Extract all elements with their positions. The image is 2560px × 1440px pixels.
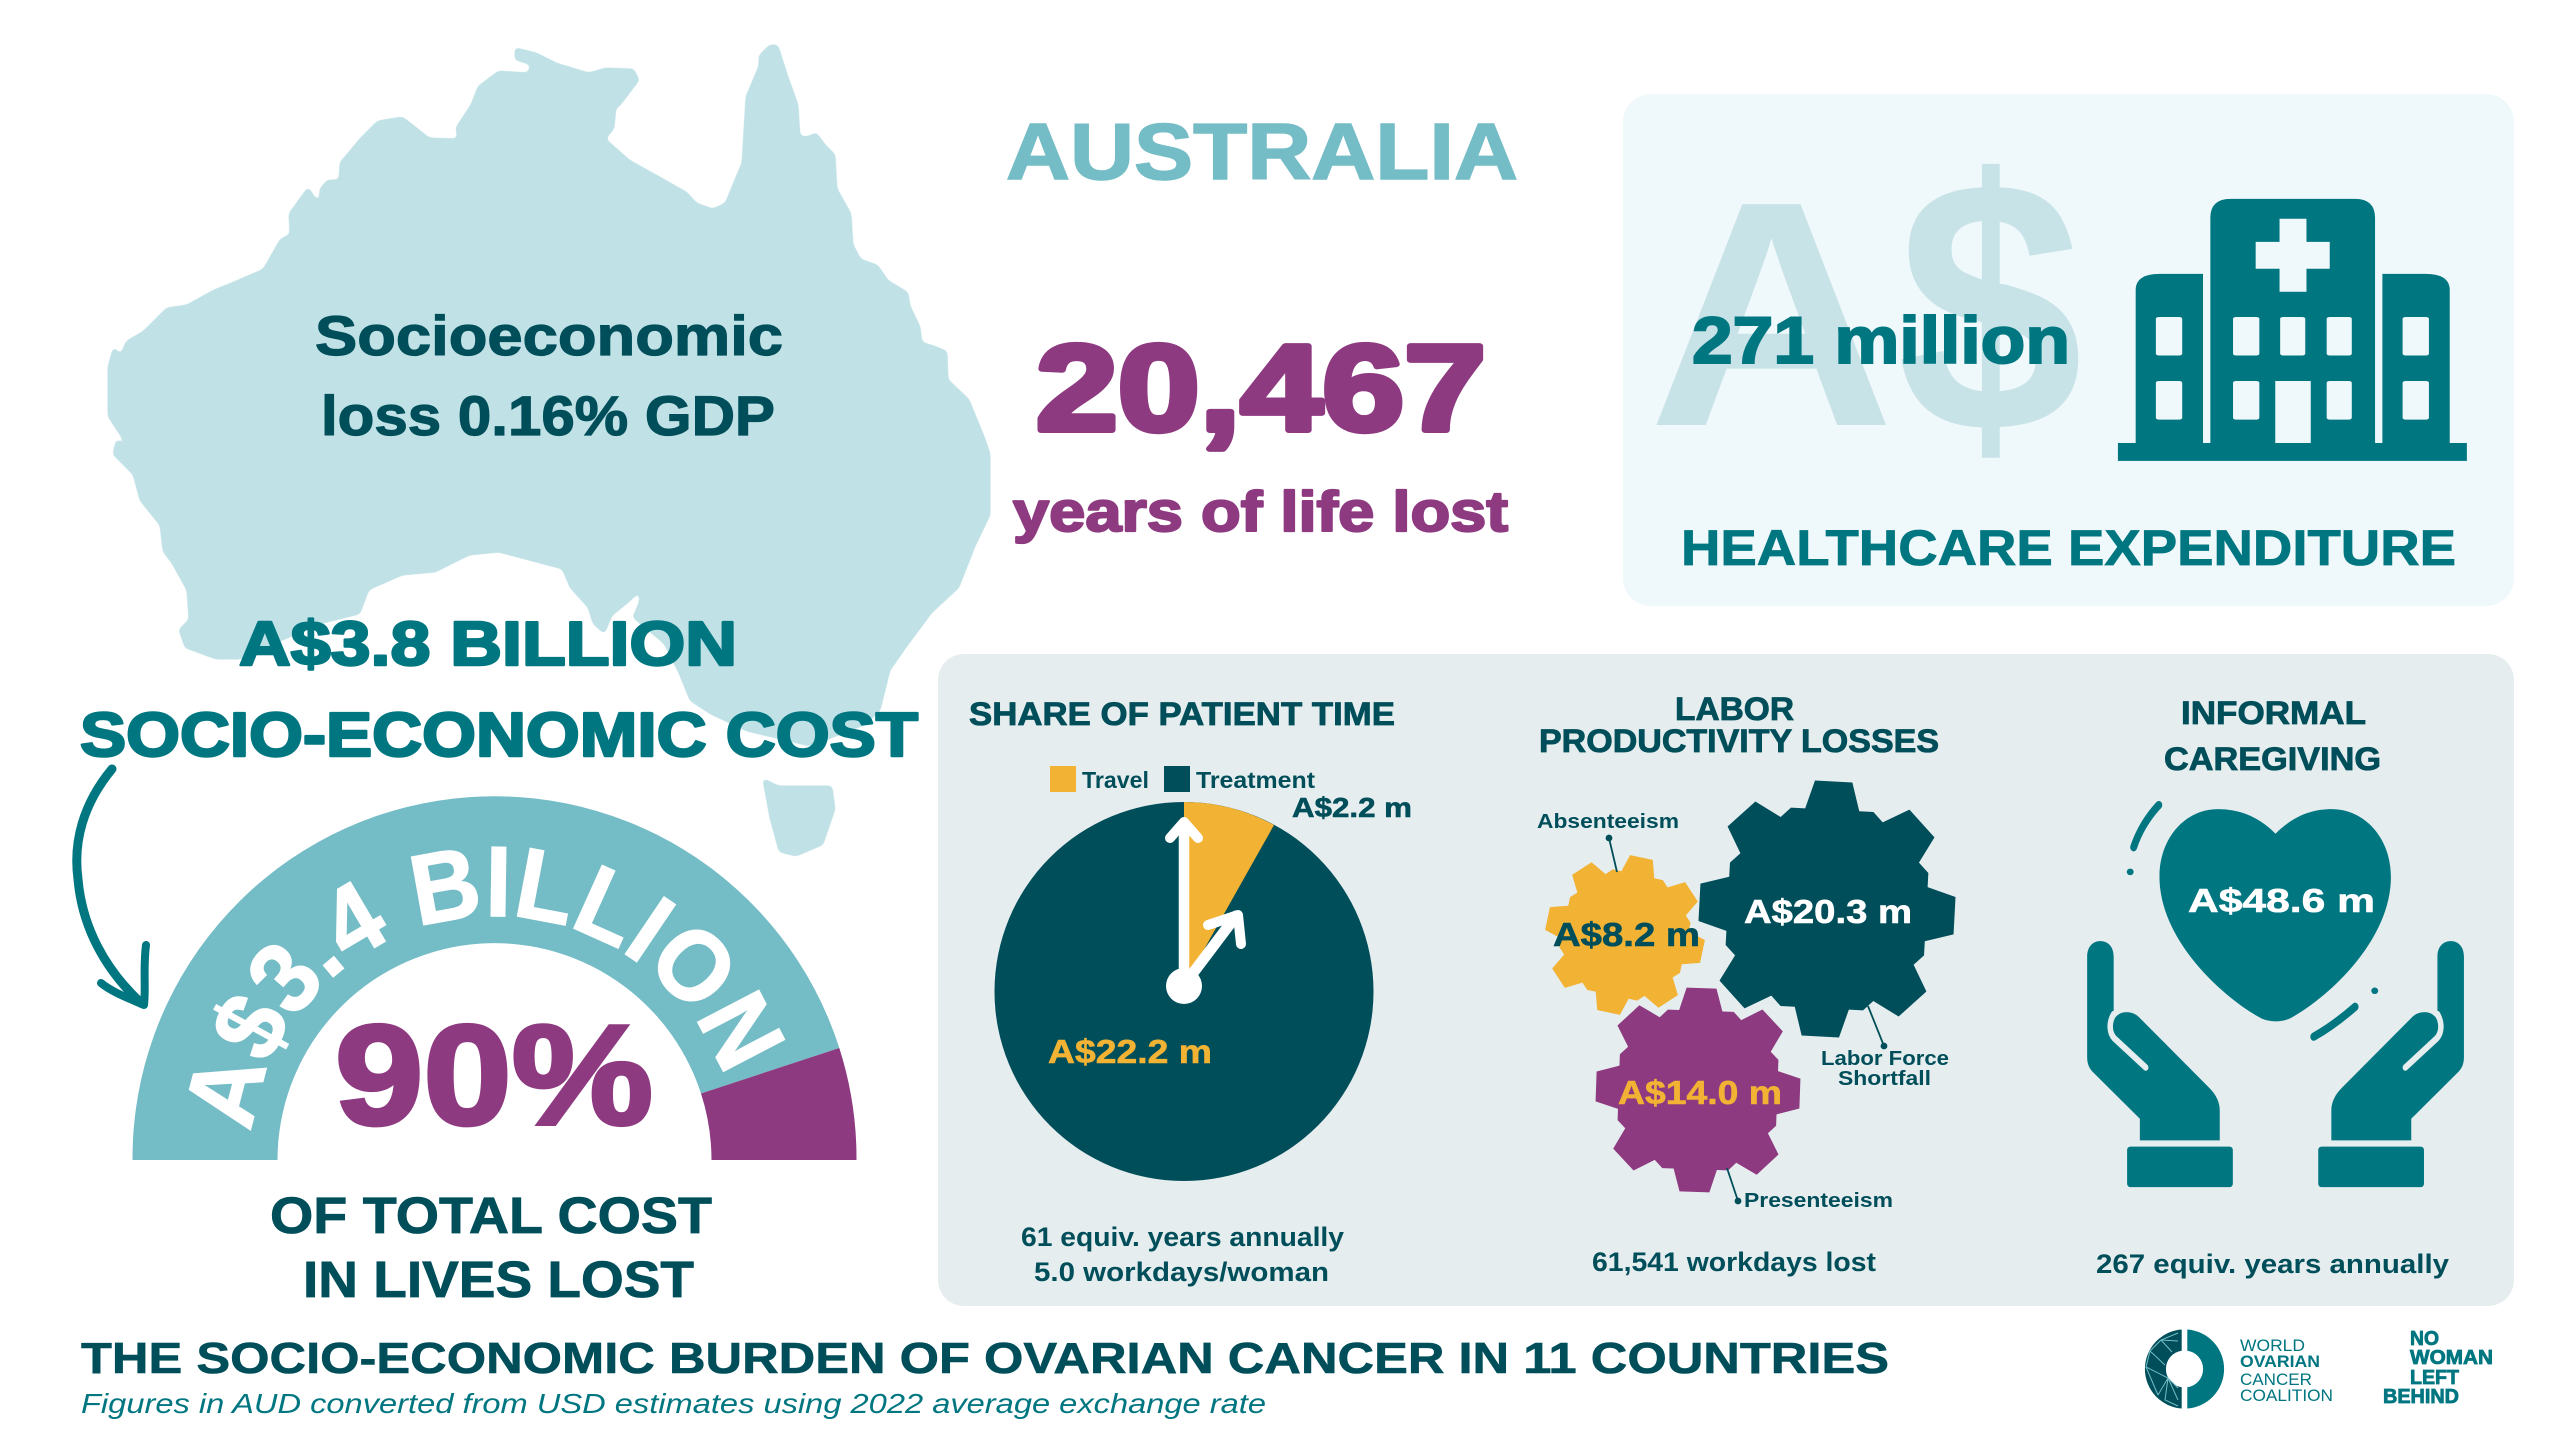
legend: Treatment <box>1196 767 1315 793</box>
gear labels: Absenteeism <box>1537 811 1679 833</box>
gear values: A$14.0 m <box>1618 1074 1782 1111</box>
logo: World Ovarian Cancer Coalition: OVARIAN <box>2240 1352 2320 1371</box>
logo: No Woman Left Behind: BEHIND <box>2383 1386 2459 1408</box>
logo: No Woman Left Behind: LEFT <box>2410 1367 2459 1389</box>
watermark: A$: $ <box>1897 106 2083 508</box>
note: 61,541 workdays lost <box>1592 1247 1876 1277</box>
value: travel: A$2.2 m <box>1292 792 1412 823</box>
sub-panel: labor productivity losses <box>1531 691 1961 1277</box>
map caption: socioeconomic loss: Socioeconomic <box>315 304 783 367</box>
gear labels <box>1537 811 1949 1212</box>
pie chart <box>994 802 1374 1181</box>
heading <box>2164 695 2381 777</box>
arrow: cost to gauge <box>77 769 146 1005</box>
logo: No Woman Left Behind: NO <box>2410 1328 2439 1350</box>
heading: SHARE OF PATIENT TIME <box>969 696 1395 732</box>
icon: heart in hands <box>2087 805 2464 1187</box>
caption: of total cost in lives lost <box>270 1187 712 1308</box>
heading <box>1539 691 1939 759</box>
heading: A$3.8 billion socio-economic cost <box>80 610 918 770</box>
curved label: A$3.4 billion: A$3.4 BILLION <box>188 846 786 1131</box>
caption: of total cost in lives lost: IN LIVES LOST <box>303 1251 694 1308</box>
stat: 20,467 years of life lost: years of life lost <box>1013 480 1508 544</box>
value: treatment: A$22.2 m <box>1048 1033 1212 1070</box>
caption: of total cost in lives lost: OF TOTAL COST <box>270 1187 712 1244</box>
footer title: THE SOCIO-ECONOMIC BURDEN OF OVARIAN CANCER IN 11 COUNTRIES <box>81 1334 1889 1383</box>
heading: LABOR <box>1675 691 1794 727</box>
note: 5.0 workdays/woman <box>1034 1257 1329 1287</box>
gauge remaining arc <box>701 1048 857 1160</box>
mainland <box>109 46 989 745</box>
note: 267 equiv. years annually <box>2096 1249 2449 1279</box>
legend: Travel <box>1082 767 1149 793</box>
legend <box>1050 766 1315 793</box>
sub-panel: share of patient time <box>969 696 1412 1287</box>
stat: 20,467 years of life lost: 20,467 <box>1036 320 1486 456</box>
gear values: A$20.3 m <box>1744 893 1912 930</box>
label: healthcare expenditure: HEALTHCARE EXPENDITURE <box>1681 520 2456 576</box>
stat: 20,467 years of life lost <box>1013 320 1508 544</box>
leader lines <box>1606 836 1886 1204</box>
logo: World Ovarian Cancer Coalition: COALITION <box>2240 1386 2333 1405</box>
gear values <box>1553 893 1912 1111</box>
gauge value: 90%: 90% <box>335 996 653 1155</box>
heading: A$3.8 billion socio-economic cost: SOCIO-ECONOMIC COST <box>80 701 918 770</box>
heading: PRODUCTIVITY LOSSES <box>1539 723 1939 759</box>
logo: World Ovarian Cancer Coalition: WORLD <box>2240 1336 2305 1355</box>
value: caregiving: A$48.6 m <box>2188 882 2375 919</box>
heading: CAREGIVING <box>2164 741 2381 777</box>
logo: World Ovarian Cancer Coalition <box>2145 1330 2333 1408</box>
sub-panel: informal caregiving <box>2087 695 2464 1279</box>
gear values: A$8.2 m <box>1553 916 1700 953</box>
note <box>1021 1222 1344 1287</box>
icon: hospital <box>2118 199 2467 461</box>
gear: presenteeism <box>1593 985 1803 1195</box>
gear labels: Labor Force <box>1821 1048 1949 1070</box>
amount: 271 million: 271 million <box>1692 303 2070 377</box>
gear labels: Presenteeism <box>1744 1190 1893 1212</box>
heading: INFORMAL <box>2181 695 2366 731</box>
title: Australia: AUSTRALIA <box>1006 107 1518 196</box>
gear labels: Shortfall <box>1838 1068 1931 1090</box>
panel: healthcare expenditure <box>1623 94 2514 606</box>
map caption: socioeconomic loss: loss 0.16% GDP <box>321 384 775 447</box>
Tasmania <box>764 780 834 855</box>
watermark: A$: A <box>1648 135 1895 494</box>
heading: A$3.8 billion socio-economic cost: A$3.8 BILLION <box>239 610 737 679</box>
footer subtitle: Figures in AUD converted from USD estimates using 2022 average exchange rate <box>81 1388 1266 1419</box>
gear: absenteeism <box>1531 841 1719 1029</box>
panel: cost breakdown <box>938 654 2514 1306</box>
logo: No Woman Left Behind: WOMAN <box>2410 1347 2493 1369</box>
watermark: A$ <box>1648 106 2083 508</box>
map caption: socioeconomic loss <box>315 304 783 447</box>
gear: labor force shortfall <box>1693 775 1961 1043</box>
icon: clock hands <box>1166 822 1241 1004</box>
gauge lives-lost arc <box>132 796 839 1160</box>
logo: No Woman Left Behind <box>2383 1328 2493 1408</box>
map of Australia <box>109 46 989 855</box>
logo: World Ovarian Cancer Coalition: CANCER <box>2240 1370 2312 1389</box>
gauge: share of total cost <box>132 796 856 1160</box>
note: 61 equiv. years annually <box>1021 1222 1344 1252</box>
